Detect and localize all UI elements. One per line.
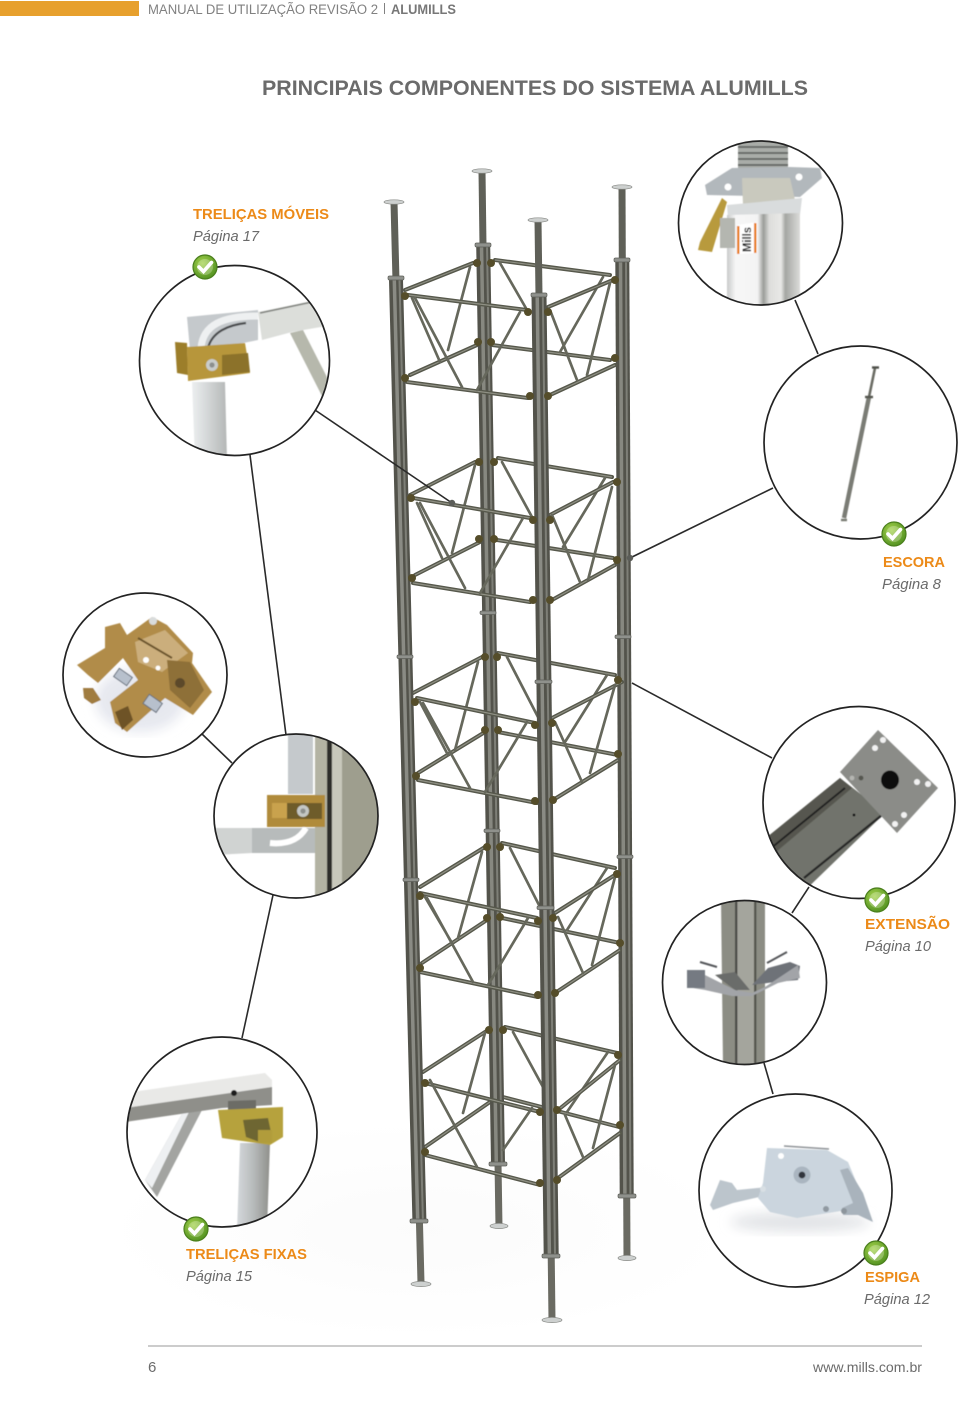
label: espiga: ESPIGA <box>865 1269 920 1286</box>
panel: extensão detail <box>745 706 955 900</box>
label: treliças fixas: TRELIÇAS FIXAS <box>186 1246 307 1263</box>
label: espiga <box>864 1269 931 1308</box>
label: treliças móveis <box>193 205 329 245</box>
icon: check treliças móveis <box>193 255 217 279</box>
connector lines <box>202 300 818 1094</box>
label: treliças móveis: TRELIÇAS MÓVEIS <box>193 205 329 223</box>
label: escora: ESCORA <box>883 554 945 571</box>
icon: check extensão <box>865 888 889 912</box>
footer: 6 <box>148 1359 156 1376</box>
icon: check treliças fixas <box>184 1217 208 1241</box>
icon: check espiga <box>864 1241 888 1265</box>
header band: ALUMILLS <box>391 2 456 17</box>
label: extensão <box>865 915 950 955</box>
title: PRINCIPAIS COMPONENTES DO SISTEMA ALUMILLS <box>262 77 808 100</box>
label: extensão: Página 10 <box>865 938 932 955</box>
panel: collar clamp detail <box>662 898 826 1066</box>
panel: treliças fixas detail <box>125 1037 317 1230</box>
truss back bars <box>405 260 623 1147</box>
panel: treliças móveis detail <box>140 266 332 460</box>
label: treliças móveis: Página 17 <box>193 228 260 245</box>
label: escora <box>882 554 945 593</box>
panel: bracket detail <box>63 593 227 757</box>
truss front bars <box>407 280 622 1185</box>
truss clamps <box>405 263 620 1183</box>
icon: check escora <box>882 522 906 546</box>
floor shadow <box>100 1120 740 1340</box>
header band: MANUAL DE UTILIZAÇÃO REVISÃO 2 <box>148 2 378 17</box>
panel: side clamp detail <box>214 732 382 902</box>
label: espiga: Página 12 <box>864 1291 931 1308</box>
label: escora: Página 8 <box>882 576 942 593</box>
label: treliças fixas <box>186 1246 307 1285</box>
post plates and collars <box>384 169 636 1323</box>
label: extensão: EXTENSÃO <box>865 915 950 933</box>
tower <box>384 169 636 1323</box>
panel: post collar detail: Mills <box>742 227 754 252</box>
footer: www.mills.com.br <box>812 1359 922 1375</box>
label: treliças fixas: Página 15 <box>186 1268 253 1285</box>
panel: espiga detail <box>699 1094 892 1287</box>
header band <box>0 1 456 17</box>
front posts <box>394 202 555 1320</box>
back posts <box>482 171 630 1258</box>
panel: escora detail <box>764 346 957 539</box>
panel: post collar detail <box>678 140 842 310</box>
footer <box>148 1346 922 1376</box>
